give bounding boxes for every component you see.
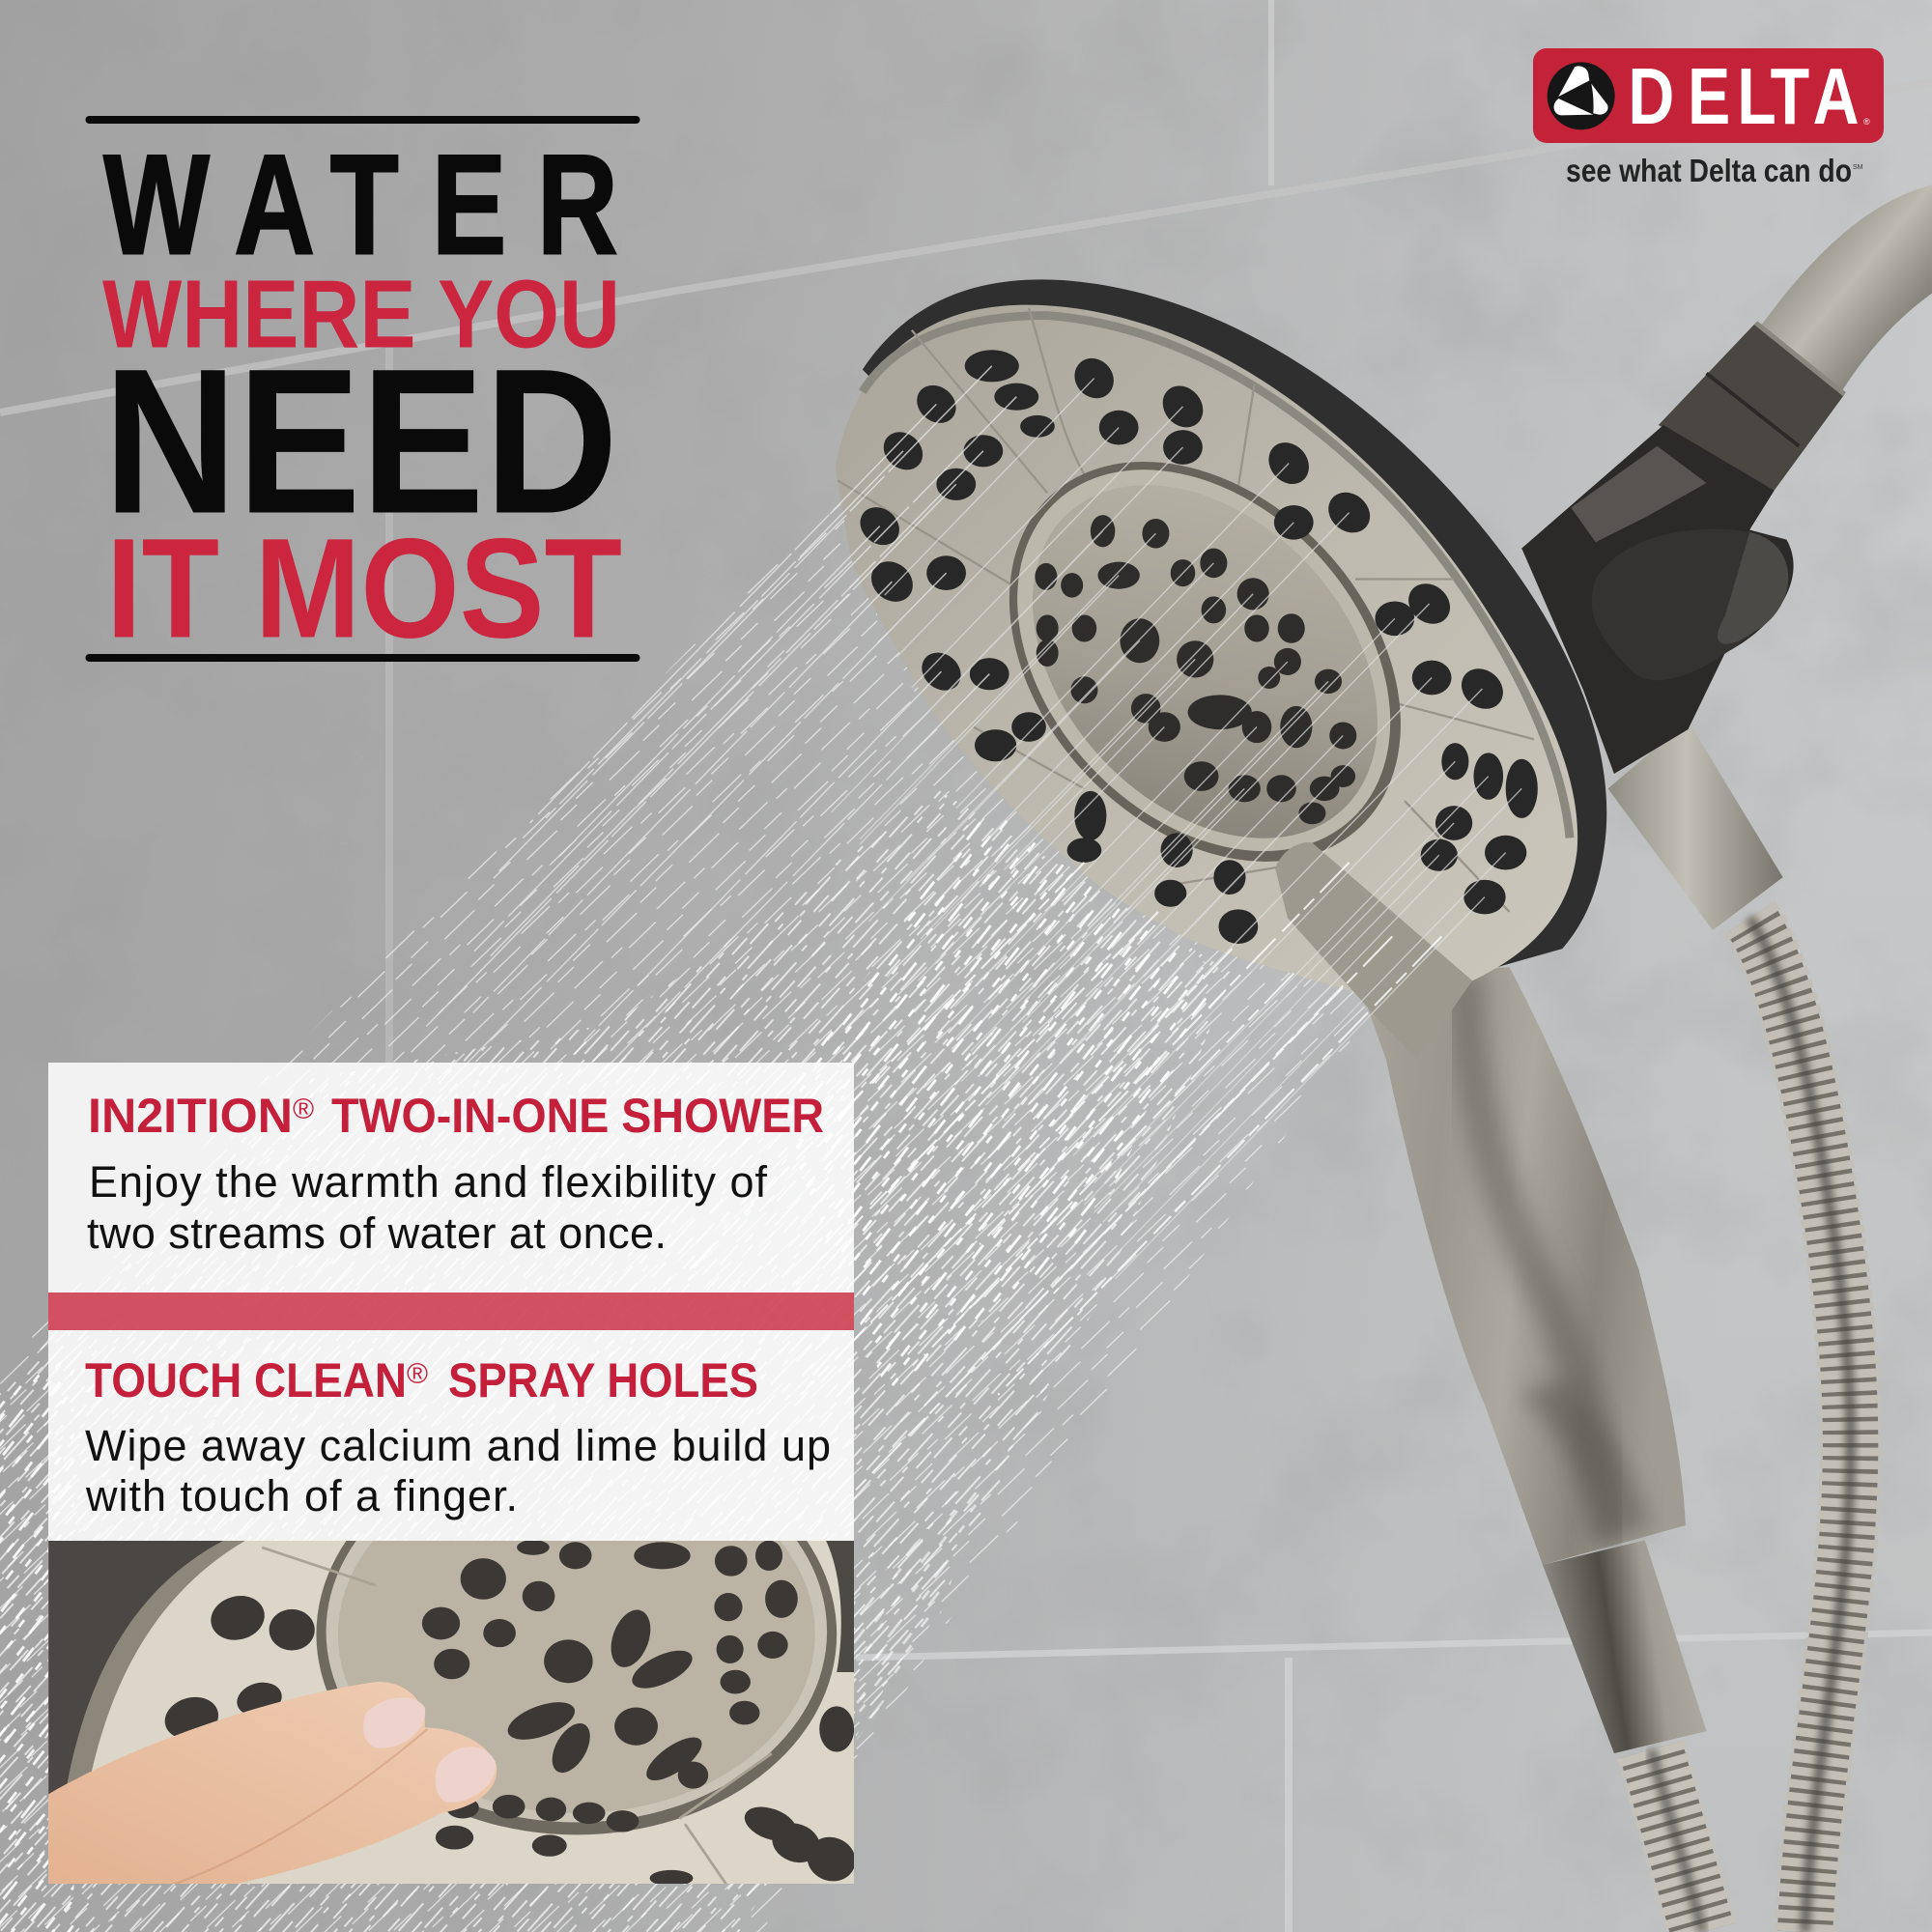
- shower arm and mount: [1521, 185, 1932, 930]
- wand neck: [1275, 842, 1472, 1060]
- upper pipe: [1756, 185, 1932, 397]
- mount highlight: [1571, 446, 1707, 542]
- inset photo: finger wiping spray holes: [48, 1541, 854, 1884]
- feature heading: Touch Clean: SPRAY HOLES: [448, 1353, 758, 1407]
- feature heading: In2ition: [88, 1089, 824, 1143]
- lower arm: [1608, 721, 1783, 930]
- logo wordmark: DELTA: [1628, 51, 1860, 141]
- title top rule: [85, 116, 639, 124]
- title line: WATER: WATER: [103, 126, 618, 285]
- feature heading: In2ition: ®: [293, 1094, 314, 1125]
- panel: product features: [48, 1063, 854, 1541]
- outer rim: [65, 1541, 245, 1797]
- feature description: In2ition: [87, 1157, 767, 1258]
- tagline: see what Delta can do: [1566, 153, 1852, 188]
- feature heading: Touch Clean: ®: [407, 1358, 428, 1390]
- water jets from the nozzles: [416, 366, 1521, 1495]
- faceplate: [836, 305, 1577, 993]
- handheld shower wand: [1355, 967, 1707, 1753]
- lower hose loop: [1651, 1749, 1703, 1932]
- dark mount body: [1521, 425, 1794, 774]
- logo emblem: [1548, 62, 1615, 129]
- inner disc: [316, 1541, 837, 1835]
- translucent white panel: [48, 1063, 854, 1541]
- logo red badge: [1533, 48, 1884, 143]
- inner spray holes: [1035, 515, 1356, 824]
- shower head: [836, 279, 1606, 1060]
- dark mount corner: [48, 1541, 224, 1797]
- title line: NEED: NEED: [103, 327, 618, 556]
- water spray streams: [0, 499, 1380, 1932]
- wedge knob: [1592, 529, 1787, 680]
- feature heading: Touch Clean: TOUCH CLEAN: [85, 1353, 407, 1407]
- feature description: In2ition: Enjoy the warmth and flexibility of: [89, 1157, 767, 1207]
- feature heading: Touch Clean: [85, 1353, 758, 1407]
- red divider band: [48, 1293, 854, 1330]
- title line: WHERE YOU: WHERE YOU: [102, 261, 620, 369]
- faceplate segment seams: [838, 308, 1534, 912]
- feature description: Touch Clean: Wipe away calcium and lime build up: [85, 1421, 831, 1470]
- feature heading: In2ition: TWO-IN-ONE SHOWER: [331, 1089, 824, 1143]
- fingers: [48, 1682, 497, 1888]
- head dark rim: [863, 279, 1606, 976]
- metal bezel: [863, 316, 1570, 838]
- registered mark: ®: [1863, 117, 1870, 127]
- spray hole cluster: [160, 1540, 862, 1888]
- inner spray disc: [930, 384, 1480, 939]
- fingernails: [363, 1697, 425, 1748]
- feature description: Touch Clean: [85, 1421, 831, 1520]
- title bottom rule: [85, 654, 639, 662]
- feature description: In2ition: two streams of water at once.: [87, 1208, 667, 1258]
- feature heading: In2ition: IN2ITION: [88, 1089, 293, 1143]
- right hose: [1749, 918, 1851, 1932]
- Delta logo: [1533, 48, 1884, 188]
- title line: IT MOST: IT MOST: [106, 510, 622, 668]
- title block: [85, 116, 639, 668]
- threaded connector: [1659, 323, 1844, 491]
- feature description: Touch Clean: with touch of a finger.: [85, 1471, 518, 1520]
- outer spray holes: [853, 350, 1538, 944]
- service mark: SM: [1853, 164, 1863, 171]
